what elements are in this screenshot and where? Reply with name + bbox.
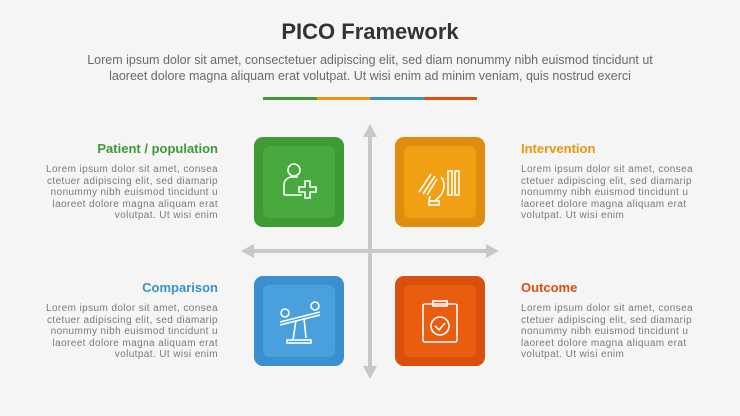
text: patient / population: Lorem ipsum dolor sit amet, consea	[46, 164, 218, 175]
text: comparison: volutpat. Ut wisi enim	[115, 349, 218, 360]
subtitle	[87, 53, 653, 82]
text: intervention: volutpat. Ut wisi enim	[521, 210, 624, 221]
text: intervention	[521, 141, 693, 221]
text: intervention: Intervention	[521, 141, 595, 156]
text: outcome: nonummy nibh euismod tincidunt u	[521, 326, 688, 337]
icon: person plus	[283, 163, 317, 199]
text: patient / population: ctetuer adipiscing elit, sed diamarip	[47, 176, 218, 187]
icon: hand stopping	[418, 170, 460, 206]
icon: seesaw	[280, 301, 320, 344]
text: comparison: laoreet dolore magna aliquam erat	[52, 338, 218, 349]
text: patient / population: nonummy nibh euismod tincidunt u	[51, 187, 218, 198]
text: outcome: volutpat. Ut wisi enim	[521, 349, 624, 360]
text: outcome: laoreet dolore magna aliquam erat	[521, 338, 687, 349]
text: patient / population: laoreet dolore magna aliquam erat	[52, 199, 218, 210]
panel: outcome box	[395, 276, 485, 366]
text: comparison: nonummy nibh euismod tincidunt u	[51, 326, 218, 337]
text: intervention: Lorem ipsum dolor sit amet, consea	[521, 164, 693, 175]
text: intervention: ctetuer adipiscing elit, sed diamarip	[521, 176, 692, 187]
text: comparison: ctetuer adipiscing elit, sed diamarip	[47, 315, 218, 326]
text: intervention: laoreet dolore magna aliquam erat	[521, 199, 687, 210]
text: intervention: nonummy nibh euismod tincidunt u	[521, 187, 688, 198]
panel: intervention box	[395, 137, 485, 227]
text: comparison: Comparison	[142, 280, 218, 295]
text: comparison	[46, 280, 218, 360]
color divider	[263, 97, 477, 100]
subtitle: Lorem ipsum dolor sit amet, consectetuer adipiscing elit, sed diam nonummy nibh euismod tincidunt ut	[87, 53, 653, 67]
panel: patient box	[254, 137, 344, 227]
title: PICO Framework	[281, 19, 459, 44]
text: outcome: Lorem ipsum dolor sit amet, consea	[521, 303, 693, 314]
text: outcome: Outcome	[521, 280, 577, 295]
text: outcome: ctetuer adipiscing elit, sed diamarip	[521, 315, 692, 326]
text: outcome	[521, 280, 693, 360]
text: patient / population: volutpat. Ut wisi enim	[115, 210, 218, 221]
text: patient / population	[46, 141, 218, 221]
icon: clipboard check	[422, 300, 458, 343]
subtitle: laoreet dolore magna aliquam erat volutpat. Ut wisi enim ad minim veniam, quis nostrud exerci	[109, 68, 631, 82]
text: patient / population: Patient / population	[97, 141, 218, 156]
text: comparison: Lorem ipsum dolor sit amet, consea	[46, 303, 218, 314]
panel: comparison box	[254, 276, 344, 366]
